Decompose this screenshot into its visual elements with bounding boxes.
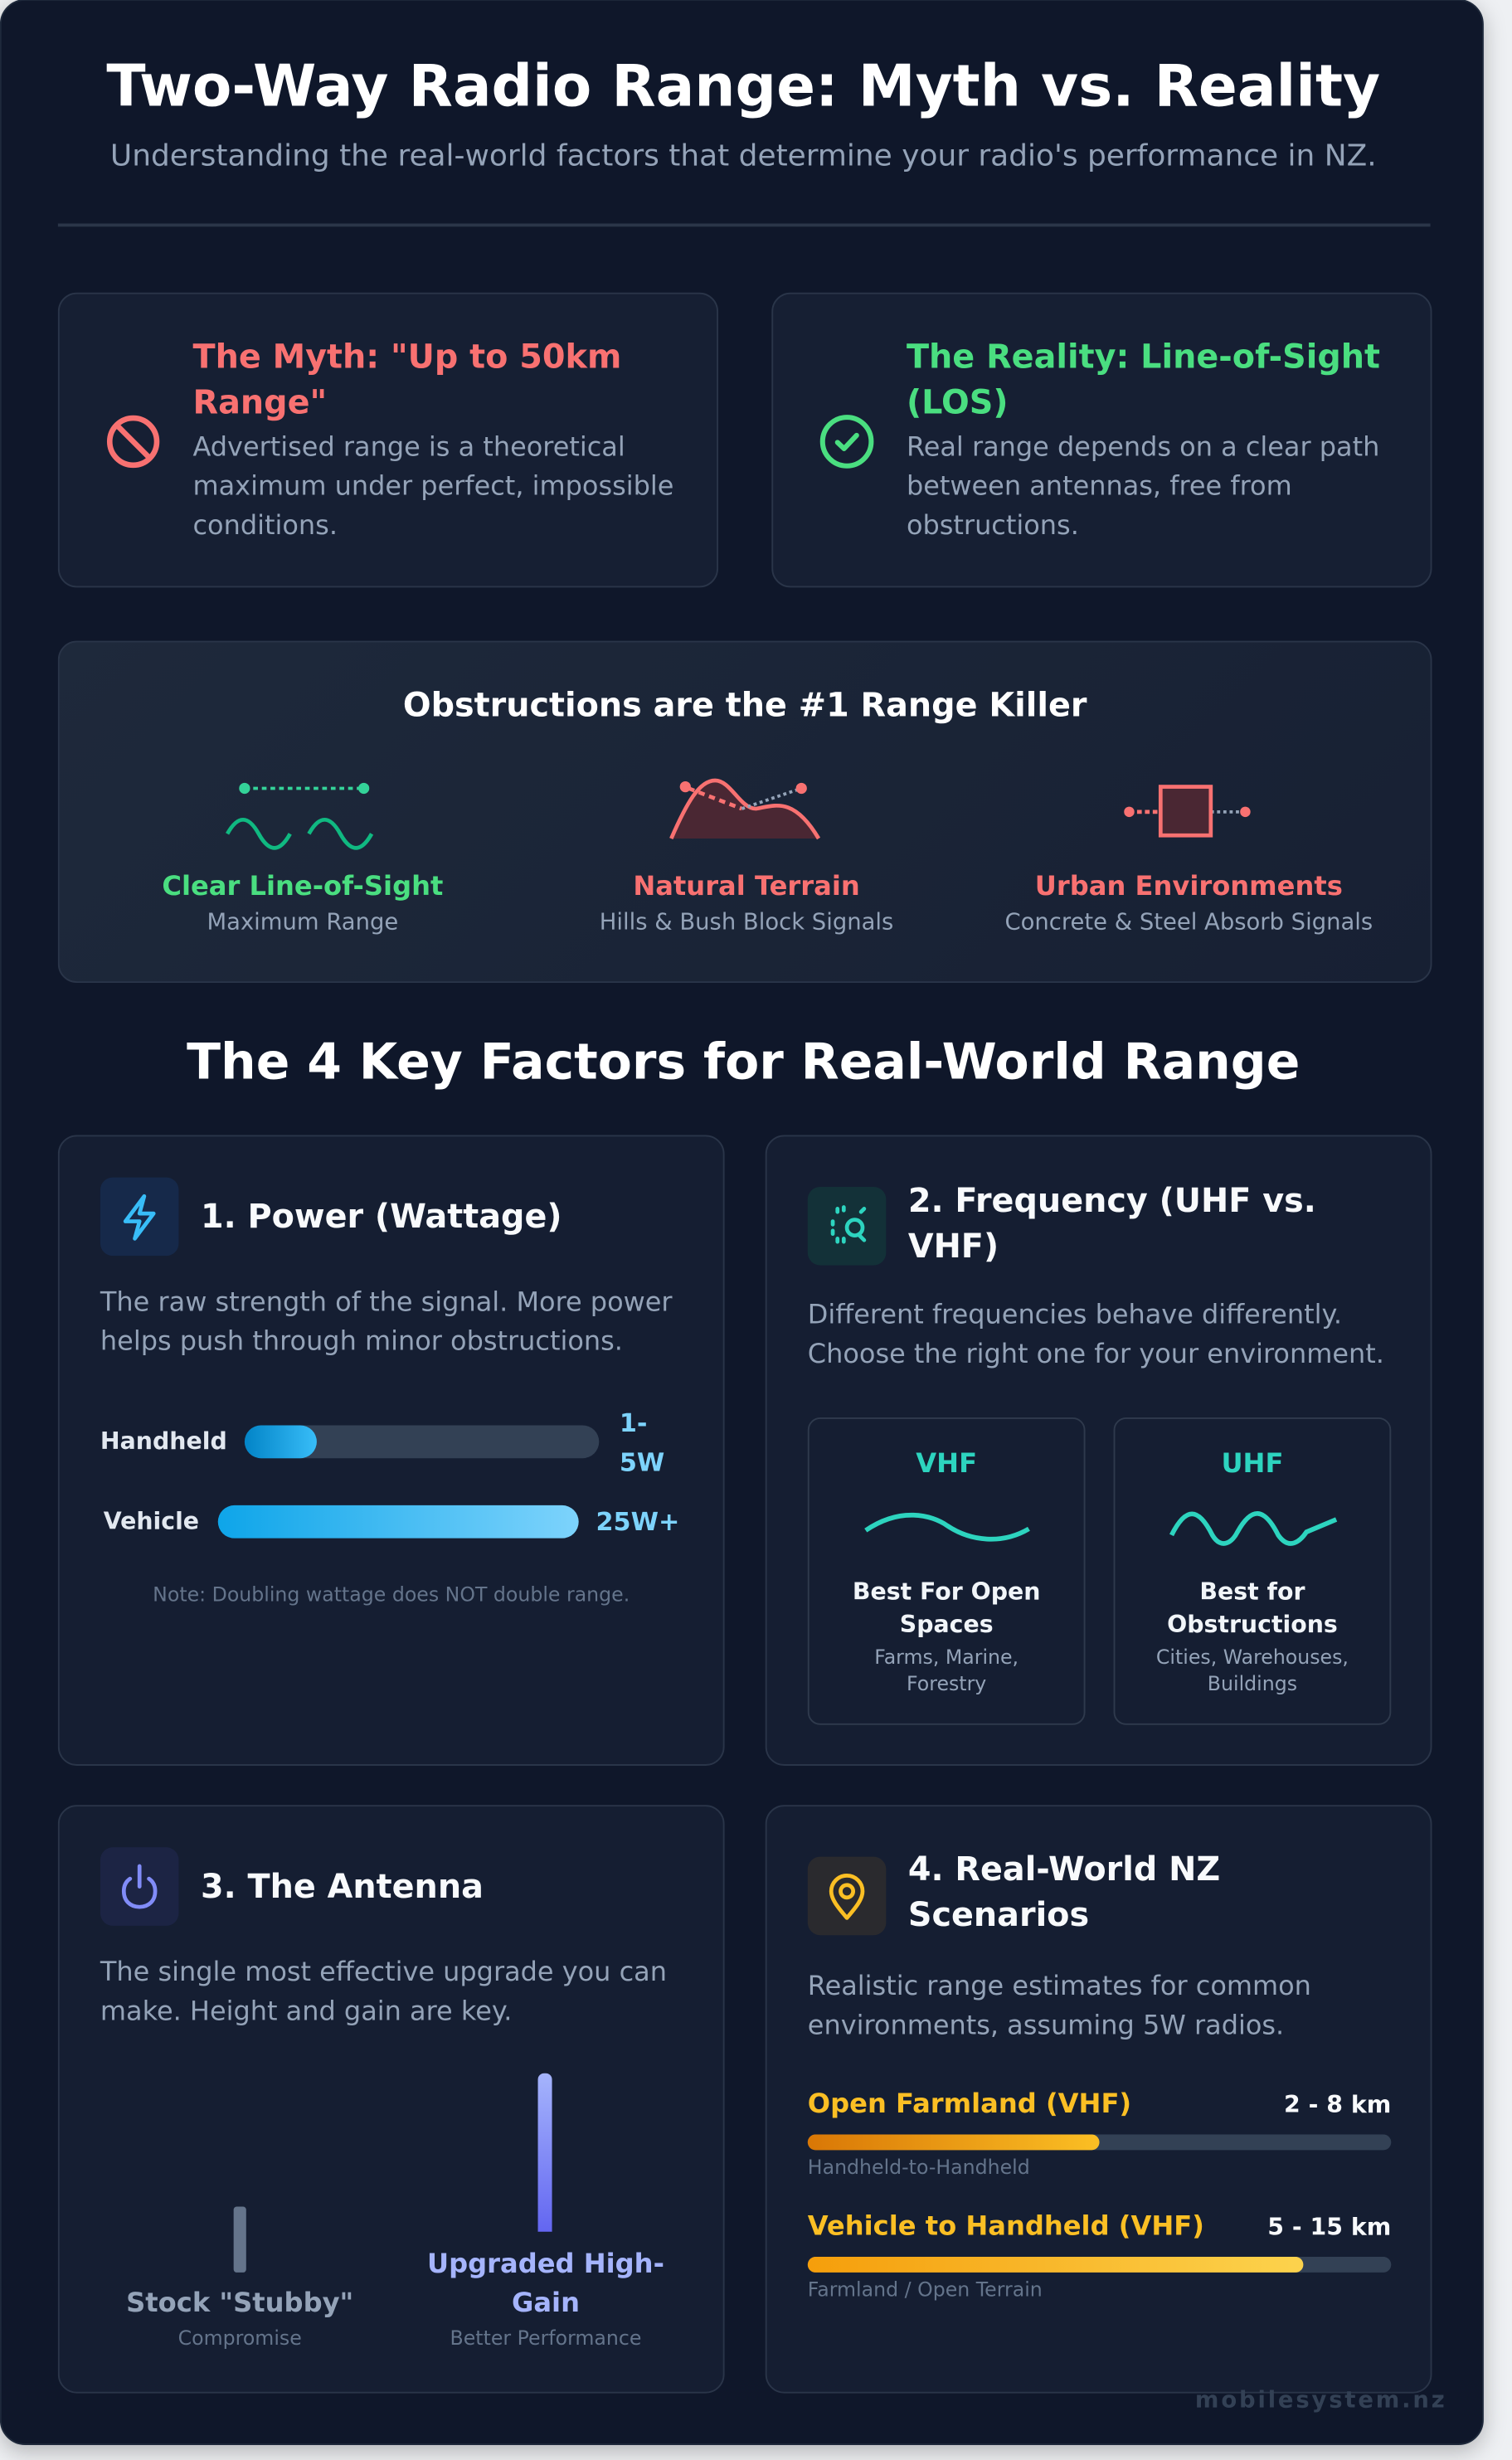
- bar: open farmland: 2 - 8 km: [1284, 2091, 1391, 2119]
- chart: antenna comparison: Upgraded High-: [427, 2249, 664, 2280]
- sub-panel: UHF: Obstructions: [1167, 1611, 1338, 1639]
- sub-panel: VHF: [808, 1417, 1086, 1725]
- bar chart: wattage: Handheld: [100, 1427, 227, 1455]
- power text: The raw strength of the signal. More power: [100, 1286, 673, 1317]
- bar: open farmland: Handheld-to-Handheld: [808, 2155, 1030, 2178]
- chart: antenna comparison: Stock "Stubby": [126, 2288, 353, 2320]
- item: natural terrain: Hills & Bush Block Signals: [600, 911, 893, 936]
- icon: hill: [669, 778, 820, 839]
- icon: long wave: [864, 1513, 1030, 1542]
- scenarios text: Realistic range estimates for common: [808, 1970, 1311, 2001]
- reality text: obstructions.: [907, 509, 1079, 541]
- sub-panel: UHF: Best for: [1199, 1578, 1305, 1606]
- myth heading: The Myth: "Up to 50km: [192, 338, 621, 376]
- bar chart: wattage: 25W+: [596, 1507, 679, 1537]
- antenna heading: 3. The Antenna: [201, 1868, 484, 1905]
- reality text: Real range depends on a clear path: [907, 430, 1379, 462]
- reality text: between antennas, free from: [907, 469, 1292, 501]
- myth heading: Range": [192, 383, 327, 421]
- scenarios text: [808, 1970, 1311, 2040]
- reality heading: The Reality: Line-of-Sight: [907, 338, 1380, 376]
- reality heading: (LOS): [907, 383, 1009, 421]
- icon: check circle: [819, 415, 874, 469]
- panel: frequency: [766, 1135, 1432, 1766]
- icon: antenna: [100, 1847, 178, 1926]
- scenarios text: environments, assuming 5W radios.: [808, 2009, 1284, 2040]
- frequency text: Choose the right one for your environment.: [808, 1338, 1384, 1369]
- sub-panel: UHF: Cities, Warehouses,: [1156, 1645, 1349, 1669]
- panel: antenna: [58, 1805, 725, 2394]
- sub-panel: VHF: Spaces: [900, 1611, 994, 1639]
- reality heading: [907, 338, 1380, 421]
- icon: frequency: [808, 1187, 886, 1266]
- bar chart: wattage: 1-: [620, 1408, 648, 1438]
- bar: open farmland: Open Farmland (VHF): [808, 2089, 1131, 2120]
- panel: reality: [771, 293, 1432, 587]
- scenarios heading: Scenarios: [908, 1896, 1089, 1933]
- bar: open farmland: [808, 2089, 1392, 2178]
- bar: vehicle to handheld: Vehicle to Handheld (VHF): [808, 2211, 1204, 2243]
- item: clear LOS: Maximum Range: [207, 911, 398, 936]
- sub-panel: UHF: UHF: [1221, 1449, 1283, 1480]
- frequency text: Different frequencies behave differently.: [808, 1298, 1342, 1330]
- icon: no sign: [106, 415, 159, 468]
- bar: vehicle to handheld: Farmland / Open Terrain: [808, 2278, 1043, 2301]
- sub-panel: VHF: Forestry: [907, 1671, 986, 1695]
- label: clear LOS: Clear Line-of-Sight: [162, 872, 443, 903]
- sub-panel: UHF: Buildings: [1208, 1671, 1297, 1695]
- chart: antenna comparison: Better Performance: [450, 2326, 641, 2350]
- panel: obstructions: [58, 641, 1432, 983]
- chart: antenna comparison: [126, 2073, 664, 2350]
- section heading: The 4 Key Factors for Real-World Range: [187, 1034, 1300, 1091]
- icon: map pin: [808, 1857, 886, 1935]
- item: urban: [1004, 785, 1373, 936]
- sub-panel: UHF: [1114, 1417, 1391, 1725]
- sub-panel: VHF: VHF: [916, 1449, 977, 1480]
- icon: bolt: [100, 1178, 178, 1256]
- power text: helps push through minor obstructions.: [100, 1325, 623, 1356]
- myth text: Advertised range is a theoretical: [192, 430, 625, 462]
- frequency heading: [908, 1182, 1316, 1266]
- antenna text: The single most effective upgrade you can: [100, 1956, 667, 1987]
- bar chart: wattage: [100, 1408, 679, 1539]
- icon: clear line of sight: [226, 783, 373, 850]
- power text: [100, 1286, 673, 1356]
- myth text: [192, 430, 673, 541]
- reality text: [907, 430, 1379, 541]
- panel: myth: [58, 293, 718, 587]
- item: natural terrain: [600, 778, 893, 936]
- title: Two-Way Radio Range: Myth vs. Reality: [106, 52, 1380, 120]
- antenna text: make. Height and gain are key.: [100, 1995, 512, 2026]
- scenarios heading: [908, 1850, 1220, 1933]
- obstructions heading: Obstructions are the #1 Range Killer: [403, 687, 1087, 724]
- item: urban: Concrete & Steel Absorb Signals: [1004, 911, 1373, 936]
- panel: scenarios: [766, 1805, 1432, 2394]
- bar chart: wattage: Vehicle: [104, 1507, 199, 1535]
- myth text: conditions.: [192, 509, 338, 541]
- antenna text: [100, 1956, 667, 2026]
- scenarios heading: 4. Real-World NZ: [908, 1850, 1220, 1888]
- myth heading: [192, 338, 621, 421]
- item: clear LOS: [162, 783, 443, 936]
- frequency text: [808, 1298, 1384, 1369]
- bar: vehicle to handheld: 5 - 15 km: [1267, 2213, 1391, 2241]
- icon: short wave: [1169, 1511, 1337, 1546]
- note: Note: Doubling wattage does NOT double range.: [153, 1582, 630, 1606]
- chart: antenna comparison: Compromise: [178, 2326, 302, 2350]
- sub-panel: VHF: Best For Open: [853, 1578, 1040, 1606]
- label: urban: Urban Environments: [1035, 872, 1343, 903]
- watermark: mobilesystem.nz: [1195, 2389, 1447, 2414]
- frequency heading: VHF): [908, 1228, 999, 1266]
- panel: power: [58, 1135, 725, 1766]
- icon: building block: [1124, 785, 1251, 838]
- sub-panel: VHF: Farms, Marine,: [874, 1645, 1019, 1669]
- label: natural terrain: Natural Terrain: [633, 872, 860, 903]
- bar chart: wattage: 5W: [620, 1447, 664, 1477]
- power heading: 1. Power (Wattage): [201, 1198, 562, 1236]
- myth text: maximum under perfect, impossible: [192, 469, 673, 501]
- subtitle: Understanding the real-world factors that determine your radio's performance in NZ.: [110, 139, 1377, 173]
- chart: antenna comparison: Gain: [512, 2288, 580, 2320]
- frequency heading: 2. Frequency (UHF vs.: [908, 1182, 1316, 1220]
- bar: vehicle to handheld: [808, 2211, 1392, 2301]
